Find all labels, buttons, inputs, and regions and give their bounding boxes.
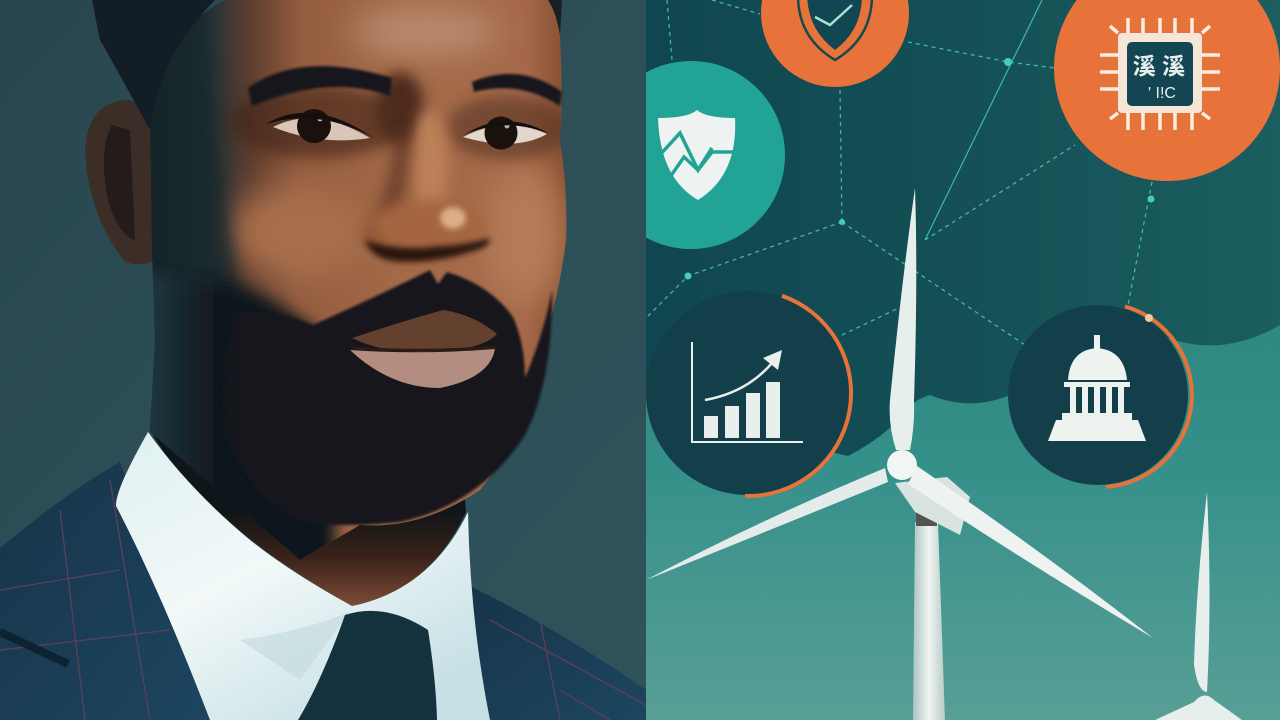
shirt collar [116, 432, 490, 720]
chip sublabel: ' I!C [1148, 85, 1176, 102]
icon: government building [1008, 305, 1192, 487]
ear [85, 100, 152, 264]
panel: portrait [0, 0, 646, 720]
hair [92, 0, 215, 130]
chip label: 溪 溪 [1133, 53, 1185, 79]
jacket left [0, 462, 215, 720]
neck [150, 430, 466, 606]
dark cloud shape [646, 0, 1280, 456]
panel: wind energy network [597, 0, 1280, 720]
icon: main wind turbine [646, 188, 1153, 720]
network lines [646, 0, 1152, 345]
tie [298, 611, 437, 720]
eyes [266, 109, 550, 150]
face [150, 0, 566, 560]
icon: growth chart [646, 291, 851, 496]
mouth [350, 310, 497, 388]
jacket right [468, 585, 646, 720]
beard [222, 270, 552, 525]
eyebrows [248, 66, 562, 106]
network nodes [684, 58, 1154, 280]
icon: orange shield top [761, 0, 909, 87]
icon: orange chip [1054, 0, 1280, 181]
icon: teal shield [646, 61, 785, 249]
icon: small wind turbine [1155, 492, 1242, 720]
